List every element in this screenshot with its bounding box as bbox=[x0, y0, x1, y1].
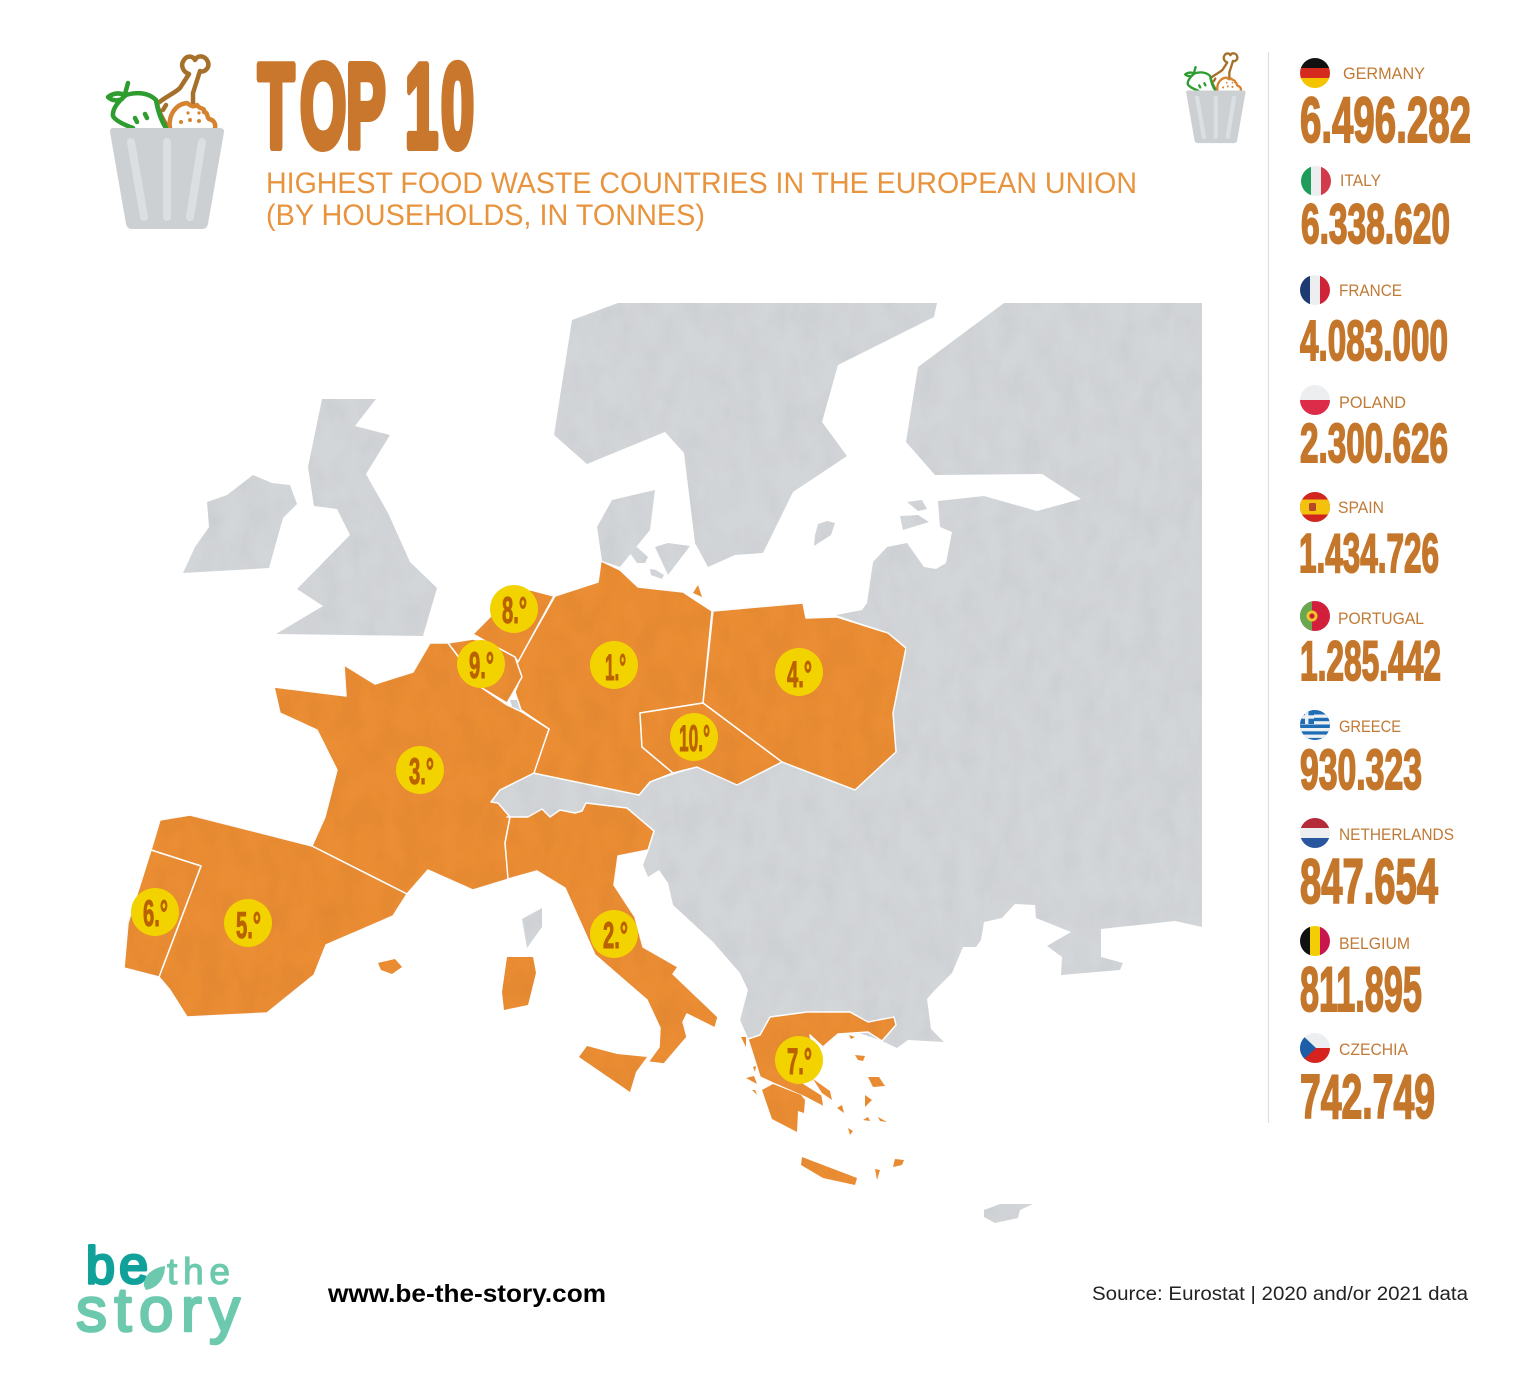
logo: be the story: the bbox=[167, 1251, 230, 1292]
marker 9: 9.° bbox=[469, 645, 494, 686]
Czechia bbox=[640, 703, 782, 785]
website: www.be-the-story.com bbox=[327, 1280, 606, 1308]
entry: Netherlands bbox=[1300, 818, 1454, 904]
entry: Belgium: BELGIUM bbox=[1339, 935, 1410, 953]
flag: France bbox=[1300, 275, 1330, 305]
flag: Spain bbox=[1300, 492, 1330, 522]
entry: Czechia bbox=[1300, 1033, 1434, 1120]
Greece bbox=[748, 1012, 896, 1107]
marker 3 bbox=[396, 746, 444, 794]
title: TOP bbox=[258, 39, 386, 172]
icon: small trash bin bbox=[1185, 53, 1245, 143]
entry: Spain: SPAIN bbox=[1338, 499, 1384, 517]
entry: Italy: ITALY bbox=[1340, 172, 1381, 190]
entry: Greece: GREECE bbox=[1339, 718, 1401, 736]
marker 10 bbox=[670, 713, 718, 761]
entry: Germany bbox=[1300, 58, 1470, 144]
marker 6: 6.° bbox=[143, 893, 168, 934]
marker 4: 4.° bbox=[787, 654, 812, 695]
flag: Belgium bbox=[1300, 926, 1330, 956]
Poland bbox=[703, 603, 906, 790]
marker 7: 7.° bbox=[787, 1041, 812, 1082]
marker 1: 1.° bbox=[605, 647, 626, 688]
marker 2 bbox=[590, 910, 638, 958]
marker 8: 8.° bbox=[502, 590, 527, 631]
logo: be the story: be bbox=[86, 1237, 148, 1295]
flag: Italy bbox=[1301, 166, 1331, 196]
entry: Portugal bbox=[1300, 601, 1440, 682]
entry: Spain: 1.434.726 bbox=[1299, 522, 1439, 584]
marker 10: 10.° bbox=[679, 718, 710, 759]
flag: Netherlands bbox=[1300, 818, 1330, 848]
entry: Italy bbox=[1301, 166, 1450, 244]
entry: Spain bbox=[1300, 492, 1438, 574]
entry: Greece: 930.323 bbox=[1300, 738, 1422, 802]
logo: be the story bbox=[76, 1237, 240, 1345]
entry: Netherlands: NETHERLANDS bbox=[1339, 826, 1454, 844]
marker 7 bbox=[775, 1036, 823, 1084]
Spain bbox=[151, 815, 407, 1017]
subtitle bbox=[266, 167, 1137, 232]
source: Source: Eurostat | 2020 and/or 2021 data bbox=[1092, 1284, 1468, 1305]
entry: Poland bbox=[1300, 385, 1448, 464]
entry: Belgium: 811.895 bbox=[1300, 955, 1422, 1025]
entry: Greece bbox=[1300, 710, 1422, 790]
Netherlands bbox=[473, 590, 554, 662]
islands in orange bbox=[378, 585, 904, 1185]
France bbox=[274, 643, 549, 894]
subtitle: HIGHEST FOOD WASTE COUNTRIES IN THE EUROPEAN UNION bbox=[266, 167, 1137, 200]
entry: France bbox=[1300, 275, 1448, 362]
flag: Poland bbox=[1300, 385, 1330, 415]
marker 5: 5.° bbox=[236, 905, 261, 946]
highlighted countries in orange bbox=[124, 561, 906, 1185]
Belgium bbox=[448, 639, 522, 703]
icon: leaf bbox=[144, 1266, 165, 1290]
Germany bbox=[515, 561, 712, 795]
entry: Czechia: CZECHIA bbox=[1339, 1041, 1408, 1059]
entry: Czechia: 742.749 bbox=[1300, 1063, 1435, 1132]
entry: Poland: POLAND bbox=[1339, 394, 1406, 412]
title bbox=[258, 39, 474, 172]
Portugal bbox=[124, 850, 201, 977]
entry: Germany: GERMANY bbox=[1343, 65, 1425, 83]
entry: France: FRANCE bbox=[1339, 282, 1402, 300]
non-ranked countries in grey bbox=[183, 303, 1202, 1223]
entry: Netherlands: 847.654 bbox=[1300, 847, 1438, 917]
marker 3: 3.° bbox=[409, 751, 434, 792]
subtitle: (BY HOUSEHOLDS, IN TONNES) bbox=[266, 199, 705, 232]
marker 4 bbox=[775, 648, 823, 696]
logo: be the story: story bbox=[76, 1276, 240, 1345]
ranking panel bbox=[1268, 52, 1471, 1132]
flag: Portugal bbox=[1300, 601, 1330, 631]
entry: Poland: 2.300.626 bbox=[1300, 412, 1448, 474]
flag: Czechia bbox=[1300, 1033, 1330, 1063]
entry: Portugal: PORTUGAL bbox=[1338, 610, 1424, 628]
map of Europe bbox=[124, 303, 1202, 1223]
marker 1 bbox=[590, 641, 638, 689]
marker 8 bbox=[490, 585, 538, 633]
flag: Germany bbox=[1300, 58, 1330, 88]
marker 9 bbox=[457, 640, 505, 688]
marker 5 bbox=[224, 899, 272, 947]
marker 6 bbox=[131, 888, 179, 936]
Italy bbox=[505, 803, 718, 1064]
entry: Belgium bbox=[1300, 926, 1422, 1012]
icon: main trash bin with food bbox=[108, 56, 224, 229]
flag: Greece bbox=[1300, 710, 1330, 740]
title: 10 bbox=[405, 39, 474, 172]
marker 2: 2.° bbox=[603, 915, 628, 956]
